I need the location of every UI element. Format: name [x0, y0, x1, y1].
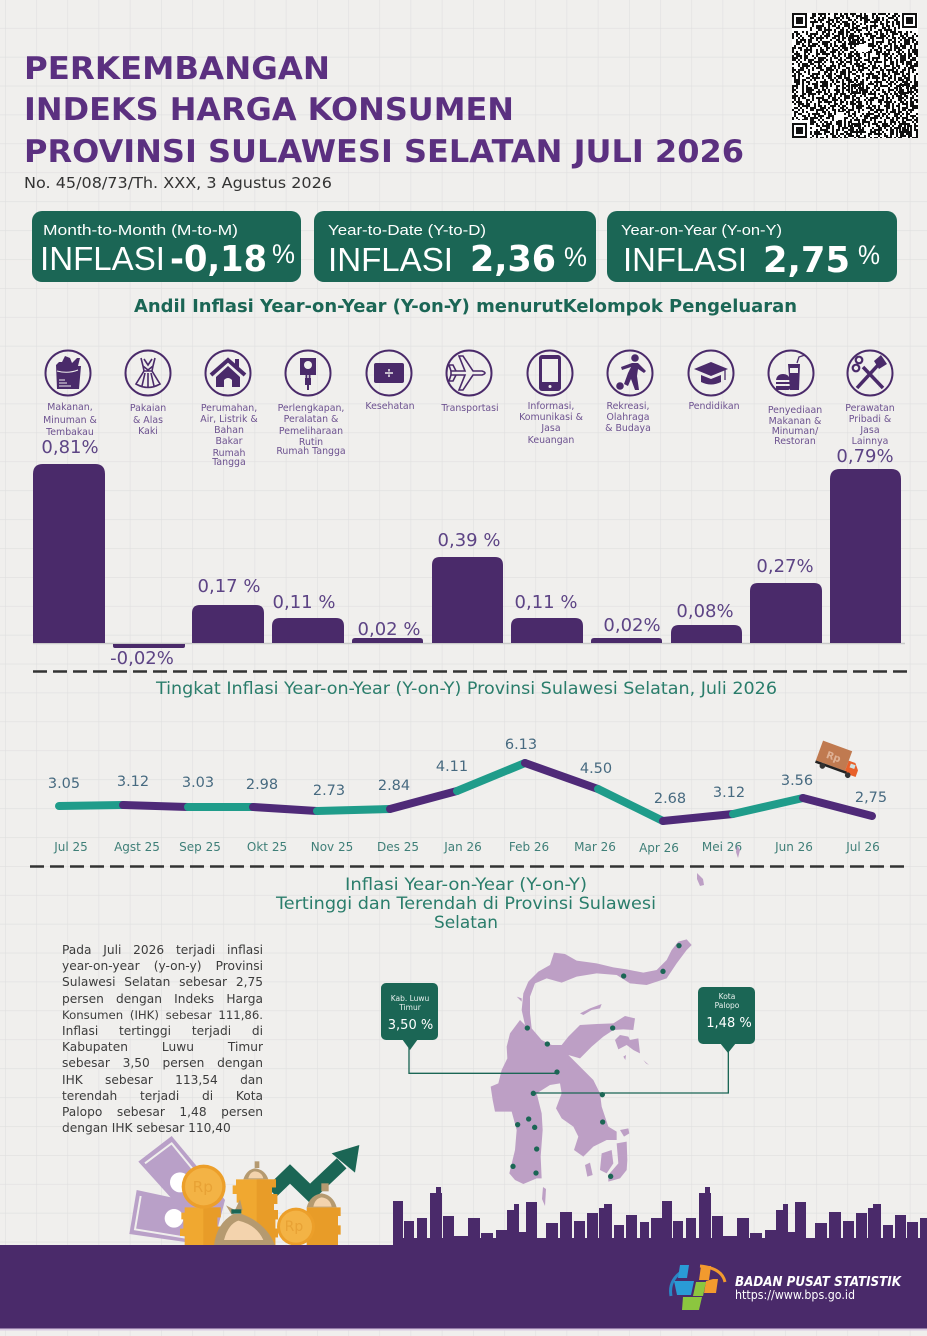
heading: inflation trend: Tingkat Inflasi Year-on-Year (Y-on-Y) Provinsi Sulawesi Selatan, Juli 2026: [155, 679, 777, 699]
publication number: No. 45/08/73/Th. XXX, 3 Agustus 2026: [24, 174, 332, 192]
icon: football player: [608, 350, 652, 396]
category labels: Pribadi &: [849, 414, 892, 425]
bar chart: 0,02 %: [358, 619, 420, 640]
bar chart: 0,79%: [836, 446, 894, 467]
paragraph: summary text: IHK sebesar 113,54 dan: [62, 1072, 263, 1086]
bar chart: 0,02%: [603, 615, 661, 636]
category labels: Rumah: [213, 448, 245, 459]
line chart: Okt 25: [247, 840, 287, 854]
bar chart: [33, 437, 905, 669]
line chart: 2.98: [246, 777, 278, 793]
category labels: Minuman &: [43, 415, 98, 426]
category labels: Pendidikan: [688, 401, 740, 412]
category labels: Makanan,: [47, 402, 93, 413]
category labels: Jasa: [540, 423, 561, 434]
line chart: 3.03: [182, 775, 214, 791]
category labels: Peralatan &: [284, 414, 339, 425]
panel: month-to-month inflation: [32, 211, 301, 282]
category labels: Pemeliharaan: [279, 426, 343, 437]
panel: year-on-year inflation: 2,75: [763, 240, 850, 281]
category labels: Tembakau: [45, 427, 94, 438]
category labels: Rumah Tangga: [276, 446, 346, 457]
line chart: Nov 25: [311, 840, 353, 854]
icon: medical case: [366, 350, 412, 396]
line chart: Apr 26: [639, 841, 679, 855]
line chart: Jan 26: [443, 840, 482, 854]
category labels: Minuman/: [772, 426, 819, 437]
panel: year-on-year inflation: [607, 211, 897, 282]
line chart: 2.84: [378, 778, 410, 794]
paragraph: summary text: dengan IHK sebesar 110,40: [62, 1121, 231, 1135]
line chart: Mei 26: [702, 840, 742, 854]
coins and sacks: Rp: [285, 1219, 303, 1235]
panel: year-on-year inflation: INFLASI: [623, 241, 747, 278]
bar chart: -0,02%: [110, 648, 174, 669]
category labels: Pakaian: [130, 403, 166, 414]
bar chart: 0,17 %: [198, 576, 260, 597]
mainland and islands: [491, 939, 692, 1184]
callout connectors: [409, 1044, 728, 1093]
category labels: Keuangan: [528, 435, 574, 446]
heading: contribution chart: Andil Inflasi Year-on-Year (Y-on-Y) menurutKelompok Pengeluaran: [134, 296, 797, 317]
bar chart: 0,27%: [756, 556, 814, 577]
line chart: Feb 26: [509, 840, 549, 854]
paragraph: summary text: Kabupaten Luwu Timur: [62, 1040, 263, 1054]
category labels: Perlengkapan,: [278, 403, 344, 414]
northern outlying islands: [697, 845, 740, 886]
panel: month-to-month inflation: Month-to-Month (M-to-M): [43, 222, 238, 239]
category labels: Olahraga: [607, 412, 649, 423]
panel: year-on-year inflation: %: [858, 240, 880, 270]
category labels: Kesehatan: [365, 401, 415, 412]
panel: month-to-month inflation: %: [272, 239, 295, 269]
callout: lowest inflation: 1,48 %: [706, 1016, 752, 1031]
map: Sulawesi with city markers: [409, 845, 740, 1206]
panel: year-to-date inflation: 2,36: [470, 239, 556, 280]
line chart: Des 25: [377, 840, 419, 854]
icon: dress: [126, 350, 170, 396]
line chart: Jul 26: [845, 840, 880, 854]
panel: year-to-date inflation: INFLASI: [328, 241, 453, 278]
line chart: Agst 25: [114, 840, 160, 854]
category labels: Informasi,: [528, 401, 574, 412]
paragraph: summary text: Inflasi tertinggi terjadi di: [62, 1024, 263, 1038]
category labels: Air, Listrik &: [200, 414, 258, 425]
city markers: [510, 943, 682, 1179]
line chart: Jul 25: [53, 840, 88, 854]
panel: year-to-date inflation: [314, 211, 596, 282]
line chart: 2.73: [313, 783, 345, 799]
icon: delivery truck: Rp: [824, 750, 842, 765]
line chart: Sep 25: [179, 840, 221, 854]
icon: smartphone: [528, 350, 572, 396]
footer band: [0, 1245, 927, 1330]
heading: highest and lowest: [275, 875, 656, 933]
icon: scissors and comb: [848, 350, 892, 396]
icon: graduation cap: [688, 350, 734, 396]
heading: highest and lowest: Selatan: [434, 913, 498, 933]
paragraph: summary text: Palopo sebesar 1,48 persen: [62, 1105, 263, 1119]
category labels: [43, 401, 895, 468]
panel: year-to-date inflation: Year-to-Date (Y-to-D): [328, 222, 486, 239]
paragraph: summary text: Pada Juli 2026 terjadi inflasi: [62, 943, 263, 957]
category labels: Tangga: [211, 457, 246, 468]
callout: highest inflation: Kab. Luwu: [391, 994, 430, 1003]
panel: month-to-month inflation: INFLASI: [40, 240, 165, 277]
line chart: 4.50: [580, 761, 612, 777]
category labels: Lainnya: [852, 436, 888, 447]
line chart: 3.12: [117, 774, 149, 790]
title: PERKEMBANGAN: [24, 51, 330, 87]
category labels: Perawatan: [845, 403, 895, 414]
paragraph: summary text: persen dengan Indeks Harga: [62, 992, 263, 1006]
paragraph: summary text: year-on-year (y-on-y) Provinsi: [62, 959, 263, 973]
footer band: BADAN PUSAT STATISTIK: [735, 1274, 902, 1290]
category labels: Rutin: [299, 437, 323, 448]
category labels: & Alas: [133, 415, 163, 426]
line chart: 3.05: [48, 776, 80, 792]
panel: month-to-month inflation: -0,18: [170, 239, 267, 280]
paragraph: summary text: terendah terjadi di Kota: [62, 1089, 263, 1103]
panel: year-to-date inflation: %: [564, 242, 587, 272]
footer band: https://www.bps.go.id: [735, 1288, 855, 1302]
heading: highest and lowest: Inflasi Year-on-Year (Y-on-Y): [345, 875, 587, 895]
category labels: Bahan: [214, 425, 244, 436]
heading: highest and lowest: Tertinggi dan Terendah di Provinsi Sulawesi: [275, 894, 656, 914]
rising arrow: [272, 1145, 359, 1193]
title: PROVINSI SULAWESI SELATAN JULI 2026: [24, 134, 744, 170]
title: [24, 51, 744, 170]
category labels: Bakar: [215, 436, 243, 447]
line chart: Mar 26: [574, 840, 616, 854]
icon: food basket: [46, 350, 90, 396]
callout: lowest inflation: Palopo: [715, 1001, 740, 1010]
icon: airplane: [446, 350, 492, 396]
paragraph: summary text: [62, 943, 263, 1135]
paragraph: summary text: Konsumen (IHK) sebesar 111,86.: [62, 1008, 263, 1022]
line chart: 2.68: [654, 791, 686, 807]
callout: highest inflation: Timur: [398, 1003, 422, 1012]
category labels: Restoran: [774, 436, 816, 447]
callout: highest inflation: 3,50 %: [388, 1018, 433, 1033]
bar chart: 0,81%: [41, 437, 99, 458]
bar chart: 0,11 %: [515, 592, 577, 613]
line chart: 4.11: [436, 759, 468, 775]
category labels: Komunikasi &: [519, 412, 584, 423]
line chart: Jun 26: [774, 840, 813, 854]
illustration: money and rising arrow: [129, 1136, 359, 1246]
city skyline: [393, 1187, 927, 1246]
icon: delivery truck: [814, 741, 863, 781]
callout: lowest inflation: [698, 987, 755, 1053]
QR code: [792, 13, 918, 138]
category labels: Jasa: [859, 425, 880, 436]
icon: house: [206, 350, 250, 396]
line chart: 3.56: [781, 773, 813, 789]
icon: burger and drink: [768, 350, 814, 396]
category labels: Penyediaan: [768, 405, 822, 416]
icon: appliance plug: [286, 350, 330, 396]
title: INDEKS HARGA KONSUMEN: [24, 92, 514, 128]
paragraph: summary text: Sulawesi Selatan sebesar 2,75: [62, 975, 263, 989]
coins and sacks: Rp: [193, 1178, 213, 1196]
Selayar island: [542, 1187, 546, 1206]
category labels: Rekreasi,: [607, 401, 649, 412]
bar chart: 0,08%: [676, 601, 734, 622]
line chart: 2,75: [855, 790, 887, 806]
line chart: 3.12: [713, 785, 745, 801]
panel: year-on-year inflation: Year-on-Year (Y-on-Y): [621, 222, 782, 239]
BPS logo: [671, 1265, 725, 1310]
callout: highest inflation: [381, 983, 438, 1050]
callout: lowest inflation: Kota: [719, 992, 735, 1001]
bar chart: 0,11 %: [273, 592, 335, 613]
category icons: [46, 350, 892, 396]
paragraph: summary text: sebesar 3,50 persen dengan: [62, 1056, 263, 1070]
bar chart: 0,39 %: [438, 530, 500, 551]
category labels: & Budaya: [605, 423, 651, 434]
category labels: Kaki: [138, 426, 158, 437]
category labels: Perumahan,: [201, 403, 257, 414]
banknotes: [129, 1136, 225, 1246]
category labels: Makanan &: [769, 416, 822, 427]
category labels: Transportasi: [440, 403, 499, 414]
line chart: [48, 737, 887, 855]
line chart: 6.13: [505, 737, 537, 753]
coins and sacks: [180, 1161, 341, 1246]
